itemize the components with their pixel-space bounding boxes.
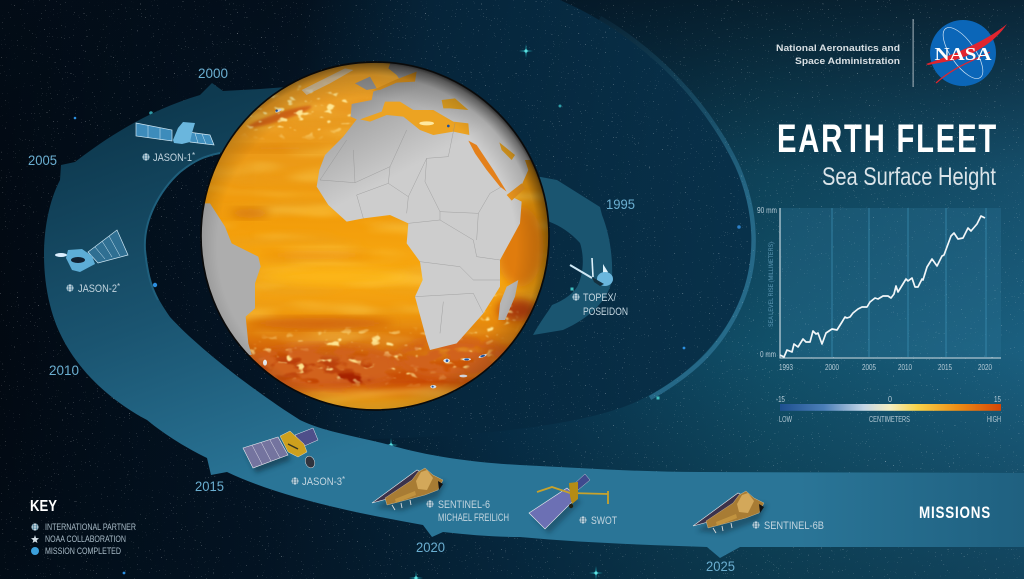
key <box>30 498 136 556</box>
mission labels: * <box>117 282 120 291</box>
colour scale legend: 0 <box>888 394 892 404</box>
satellite: JASON-1 <box>136 122 214 145</box>
line chart: sea level rise: 2015 <box>938 362 952 372</box>
colour scale legend: 15 <box>994 394 1001 404</box>
satellite: Sentinel-6B <box>693 491 767 534</box>
mission labels: SWOT <box>591 515 617 527</box>
ocean anomalies: soft bands <box>230 103 543 384</box>
key: KEY <box>30 498 57 515</box>
satellite: TOPEX/Poseidon <box>570 258 613 286</box>
ocean base colour <box>200 60 550 413</box>
mission labels: JASON-1 <box>153 152 192 164</box>
agency name <box>776 43 900 67</box>
year labels <box>28 65 735 574</box>
divider <box>913 19 914 87</box>
mission labels: JASON-3 <box>302 476 342 488</box>
ocean eddies: north Atlantic yellow <box>244 82 351 140</box>
NASA meatball logo: NASA <box>934 44 992 64</box>
mission labels: MICHAEL FREILICH <box>438 512 509 524</box>
national borders <box>320 123 502 333</box>
satellite: JASON-3 <box>243 428 318 473</box>
mission labels: POSEIDON <box>583 306 628 318</box>
year labels: 2000 <box>198 65 228 81</box>
land: Greenland fringe <box>302 68 353 95</box>
colour scale legend <box>776 394 1001 424</box>
land: Africa and Eurasia <box>316 64 530 350</box>
mission labels: * <box>192 151 195 160</box>
ocean streaks: lighter <box>224 104 548 404</box>
mission labels: SENTINEL-6 <box>438 499 490 511</box>
line chart: sea level rise: 90 mm <box>757 205 777 215</box>
mission labels: TOPEX/ <box>583 292 617 304</box>
line chart: sea level rise: 1993 <box>779 362 793 372</box>
ocean eddies: south yellow <box>240 332 493 382</box>
line chart: sea level rise: SEA LEVEL RISE (MILLIMETERS) <box>768 242 775 327</box>
colour scale legend: CENTIMETERS <box>869 414 910 424</box>
year labels: 1995 <box>606 196 635 212</box>
colour scale legend: -15 <box>776 394 785 404</box>
key: INTERNATIONAL PARTNER <box>45 522 136 532</box>
year labels: 2015 <box>195 478 224 494</box>
satellite: Sentinel-6 Michael Freilich <box>372 468 446 511</box>
year labels: 2005 <box>28 152 57 168</box>
mission labels: JASON-2 <box>78 283 117 295</box>
ocean eddies: south Atlantic red <box>240 345 407 388</box>
year labels: 2010 <box>49 362 79 378</box>
satellite: JASON-2 <box>55 230 128 272</box>
mission timeline band: 1995 segment <box>530 175 612 335</box>
year labels: 2025 <box>706 558 735 574</box>
globe: Earth sea surface height map <box>193 57 567 417</box>
land: British Isles <box>355 77 377 90</box>
line chart: sea level rise: 2020 <box>978 362 992 372</box>
ocean streaks: darker <box>250 203 516 390</box>
NASA meatball logo <box>926 20 1007 86</box>
mission labels: * <box>342 475 345 484</box>
satellite: SWOT <box>529 474 608 534</box>
colour scale legend: LOW <box>779 414 792 424</box>
land: South America <box>202 203 261 355</box>
line chart: sea level rise <box>757 205 1001 372</box>
agency name: Space Administration <box>795 56 900 67</box>
mission timeline band: 2000 through 2025 <box>44 83 1024 558</box>
key: MISSION COMPLETED <box>45 546 121 556</box>
mission labels: SENTINEL-6B <box>764 520 824 532</box>
key: NOAA COLLABORATION <box>45 534 126 544</box>
sphere limb shading <box>197 57 557 417</box>
line chart: sea level rise: 2000 <box>825 362 839 372</box>
year labels: 2020 <box>416 539 445 555</box>
colour scale legend: HIGH <box>987 414 1001 424</box>
ocean eddies: Agulhas yellow <box>460 293 513 340</box>
eddy dots: cold anomalies <box>263 108 487 388</box>
ocean eddies: southern Indian Ocean red <box>397 338 510 378</box>
agency name: National Aeronautics and <box>776 43 900 54</box>
line chart: sea level rise: 2005 <box>862 362 876 372</box>
line chart: sea level rise: 0 mm <box>760 349 776 359</box>
large faint orbit ellipse <box>300 0 754 440</box>
inland seas <box>360 72 525 201</box>
globe outline <box>201 62 549 410</box>
line chart: sea level rise: 2010 <box>898 362 912 372</box>
MISSIONS heading: MISSIONS <box>919 503 991 522</box>
land: Madagascar <box>498 280 518 320</box>
bright stars <box>74 44 741 579</box>
mission labels <box>66 151 824 532</box>
